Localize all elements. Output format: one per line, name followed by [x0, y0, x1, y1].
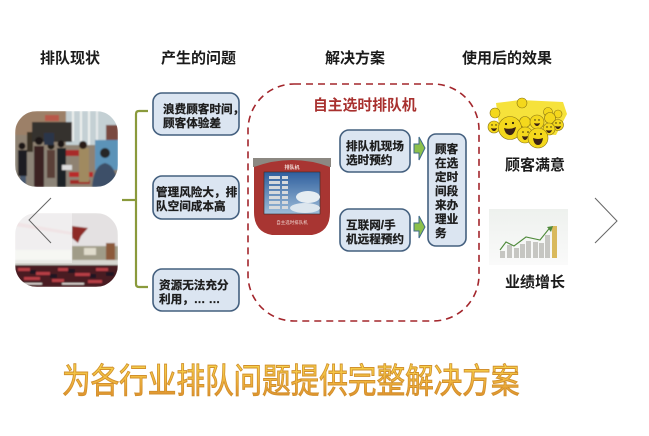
photo: outdoor crowd — [15, 213, 118, 287]
panel title: 自主选时排队机 — [313, 96, 417, 114]
heading: problems: 产生的问题 — [161, 49, 236, 67]
problem box 2: 管理风险大，排 — [156, 185, 238, 199]
problem box 2 — [153, 176, 239, 219]
photo: indoor queue — [15, 111, 118, 187]
result box: 来办 — [435, 198, 459, 212]
bracket — [122, 111, 148, 287]
arrow: bottom — [414, 216, 425, 238]
arrow: top — [414, 137, 425, 160]
result box: 务 — [435, 226, 447, 240]
label: business growth: 业绩增长 — [505, 273, 565, 291]
icon: self-service kiosk: 自主选时排队机 — [276, 219, 308, 226]
result box: 定时 — [435, 170, 459, 184]
icon: self-service kiosk: 排队机 — [284, 164, 300, 171]
result box: 顾客 — [435, 142, 459, 156]
solution box: online booking: 机远程预约 — [346, 232, 404, 246]
chart: business growth — [489, 209, 568, 265]
solution box: on-site booking: 选时预约 — [346, 153, 392, 167]
problem box 2: 队空间成本高 — [156, 199, 226, 213]
result box: 理业 — [435, 213, 459, 226]
result box: 在选 — [435, 156, 459, 170]
bottom slogan: 为各行业排队问题提供完整解决方案 — [62, 361, 519, 401]
problem box 3: 资源无法充分 — [159, 278, 229, 292]
white wash over left half of photo — [15, 213, 72, 263]
icon: self-service kiosk — [253, 158, 331, 235]
solution box: online booking: 互联网/手 — [346, 218, 396, 232]
panel: dashed solution frame — [248, 84, 479, 321]
heading: effects: 使用后的效果 — [462, 49, 552, 67]
heading: current situation: 排队现状 — [40, 49, 100, 67]
label: customer satisfaction: 顾客满意 — [505, 156, 565, 174]
solution box: on-site booking: 排队机现场 — [346, 139, 404, 153]
solution box: on-site booking — [340, 130, 410, 172]
result box: 间段 — [435, 184, 459, 198]
problem box 1 — [153, 93, 244, 135]
icon: smiley crowd — [488, 98, 567, 148]
problem box 3: 利用，… … — [159, 292, 220, 306]
heading: solution: 解决方案 — [325, 49, 385, 67]
arrow: carousel next — [595, 198, 617, 243]
arrow: carousel previous — [29, 198, 51, 243]
solution box: online booking — [340, 209, 410, 251]
problem box 1: 顾客体验差 — [163, 116, 221, 130]
problem box 3 — [153, 269, 239, 311]
result box — [428, 134, 466, 246]
problem box 1: 浪费顾客时间， — [163, 102, 244, 116]
